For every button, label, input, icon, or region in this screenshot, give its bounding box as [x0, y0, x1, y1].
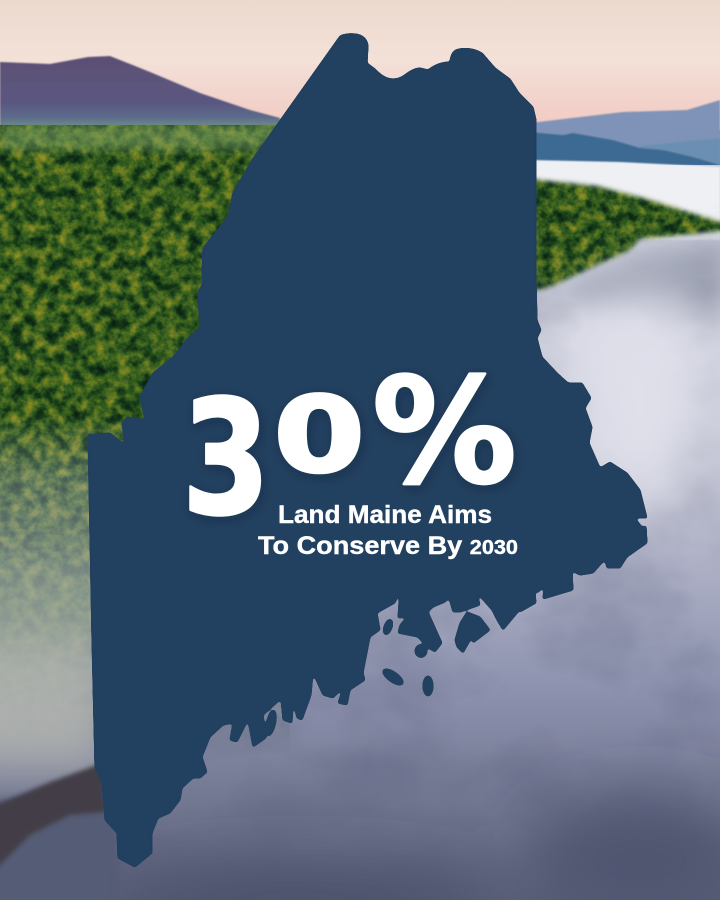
digit 3: 3 [182, 366, 270, 551]
statistic: 30% [182, 347, 517, 551]
right distant mountains [530, 100, 720, 170]
large island [455, 612, 490, 653]
right forest ridge [530, 170, 720, 295]
percent sign: % [372, 347, 517, 517]
left low fog mist [0, 560, 110, 770]
forest haze at far distance [0, 124, 290, 150]
right fog band [530, 160, 720, 240]
left forest [0, 125, 290, 755]
lower right fog forms [268, 281, 720, 806]
dark lake patch bottom left [0, 762, 105, 870]
map: state of Maine silhouette [88, 34, 647, 867]
fog shade under ridge [540, 236, 720, 312]
bottom-left water tone [0, 800, 120, 900]
digit 0: 0 [274, 375, 364, 496]
caption line 1: Land Maine Aims [278, 501, 492, 529]
sky [0, 0, 720, 130]
caption [258, 501, 518, 560]
caption line 2: To Conserve By 2030 [258, 532, 518, 560]
left mountain [0, 56, 280, 130]
mainland outline [88, 34, 647, 867]
small islands [264, 618, 433, 737]
